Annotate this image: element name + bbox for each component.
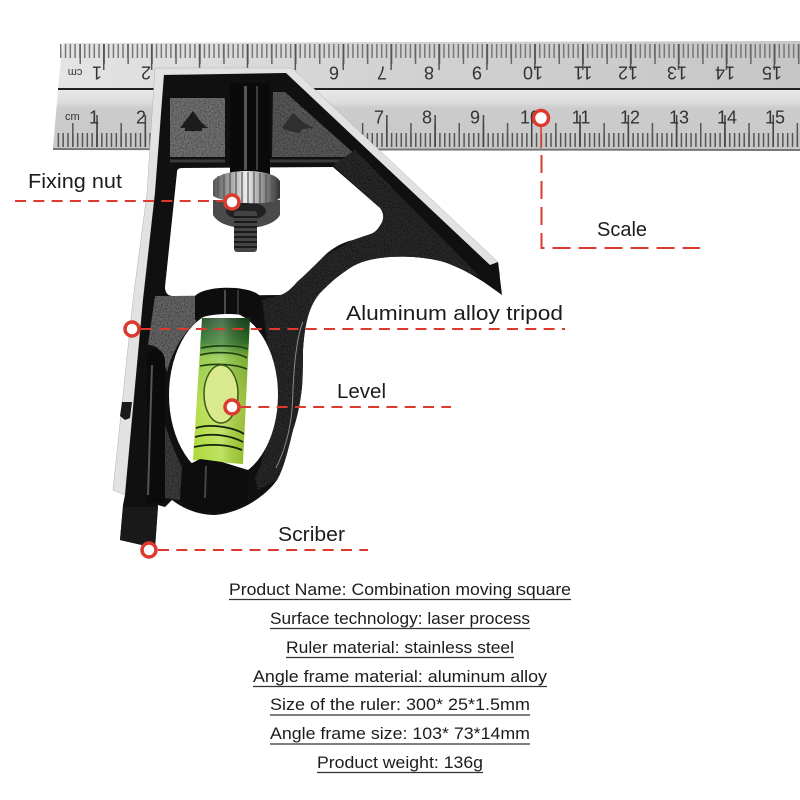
callout: Level (225, 381, 451, 414)
fixing nut (213, 171, 280, 252)
upper steel ruler: 10 (523, 62, 543, 82)
level top cap (195, 288, 260, 320)
level bottom cap (180, 459, 248, 511)
callout: Aluminum alloy tripod (125, 303, 565, 336)
upper steel ruler: 12 (618, 62, 638, 82)
upper steel ruler: 11 (574, 62, 592, 82)
callout: Scriber: Scriber (278, 524, 345, 546)
lower oval opening (169, 311, 278, 479)
angle frame body (113, 68, 502, 548)
lower steel ruler: 9 (470, 108, 480, 128)
callout: Scriber (142, 524, 368, 557)
grey cast gusset left (148, 296, 196, 372)
upper steel ruler: 15 (762, 62, 782, 82)
spec: ruler size: Size of the ruler: 300* 25*1.5mm (270, 695, 530, 714)
upper steel ruler: 8 (424, 62, 434, 82)
spec: angle frame size: Angle frame size: 103* 73*14mm (270, 724, 530, 743)
lower steel ruler: 2 (136, 108, 146, 128)
upper steel ruler: cm (68, 66, 82, 78)
lower steel ruler: 8 (422, 108, 432, 128)
specification list (229, 580, 571, 772)
callout: Scale (534, 110, 700, 248)
upper steel ruler: 7 (377, 62, 387, 82)
spec: ruler material: Ruler material: stainless steel (286, 638, 514, 657)
grey strip below panels (170, 160, 350, 162)
upper steel ruler: 14 (715, 62, 735, 82)
upper steel ruler: 2 (141, 62, 151, 82)
ruler divider line (58, 88, 800, 90)
spec: product weight: Product weight: 136g (317, 753, 483, 772)
lower steel ruler: 12 (620, 108, 640, 128)
lower steel ruler: 13 (669, 108, 689, 128)
arrow mark left (180, 111, 208, 131)
lower steel ruler: cm (65, 111, 80, 123)
black cast frame (120, 73, 502, 548)
spec: product name: Product Name: Combination moving square (229, 580, 571, 599)
spirit level vial (193, 318, 250, 464)
callout: Fixing nut: Fixing nut (28, 171, 122, 193)
callout: Fixing nut (15, 171, 239, 209)
callout: Aluminum alloy tripod: Aluminum alloy tripod (346, 303, 563, 325)
callout: Scale: Scale (597, 219, 647, 241)
upper steel ruler: 9 (472, 62, 482, 82)
left edge notch (120, 402, 132, 420)
lower steel ruler: 10 (520, 108, 540, 128)
arm highlight (276, 322, 303, 468)
lower steel ruler (53, 90, 800, 150)
upper steel ruler: 1 (92, 62, 102, 82)
grey cast panel right (272, 92, 358, 157)
lower steel ruler: 1 (89, 108, 99, 128)
dark arm casting (255, 150, 480, 490)
arrow mark right (282, 113, 314, 133)
spec: angle frame material: Angle frame material: aluminum alloy (253, 667, 548, 686)
upper steel ruler: 6 (329, 62, 339, 82)
callout: Level: Level (337, 381, 386, 403)
upper steel ruler: 13 (667, 62, 687, 82)
grey cast panel left (170, 98, 225, 157)
lower steel ruler: 7 (374, 108, 384, 128)
lower steel ruler: 15 (765, 108, 785, 128)
lower steel ruler: 11 (572, 108, 590, 128)
locking stem (230, 83, 270, 175)
spec: surface technology: Surface technology: laser process (270, 609, 530, 628)
upper opening (165, 167, 383, 296)
lower steel ruler: 14 (717, 108, 737, 128)
upper steel ruler (58, 41, 800, 88)
grey cast gusset bottom left (165, 425, 182, 500)
scriber post (120, 349, 165, 548)
silver frame edge (113, 68, 500, 495)
